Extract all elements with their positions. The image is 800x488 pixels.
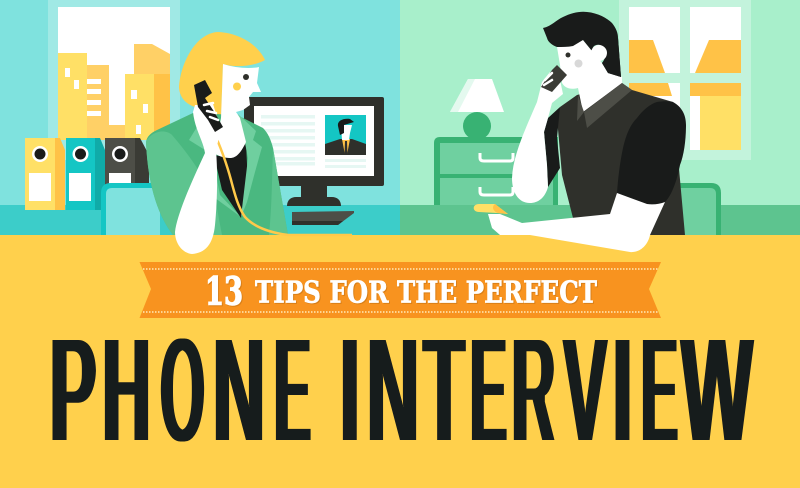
fingers: [544, 73, 552, 85]
keyboard: [292, 211, 354, 225]
window with curtains: [619, 0, 751, 160]
window with city skyline: [48, 0, 180, 160]
collar: [577, 83, 632, 128]
left lapel: [189, 122, 205, 150]
fingers: [204, 103, 218, 120]
woman jacket: [146, 113, 288, 235]
hair over ear edge: [602, 38, 621, 77]
lamp: [450, 79, 504, 140]
eye: [566, 52, 570, 58]
title: PHONE INTERVIEW: P: [50, 305, 96, 476]
right lapel: [238, 114, 262, 217]
black top: [214, 143, 248, 218]
armchair: [670, 183, 721, 235]
cheek: [233, 82, 241, 90]
ribbon banner: [140, 262, 661, 318]
lower left lapel: [215, 175, 241, 217]
phone cord: [214, 133, 352, 235]
eye: [243, 74, 249, 80]
yellow title panel: [0, 235, 800, 488]
hair: [543, 12, 621, 77]
title: PHONE INTERVIEW: I: [340, 305, 359, 477]
vest: [557, 83, 685, 235]
title: PHONE INTERVIEW: O: [160, 304, 205, 476]
title: PHONE INTERVIEW: E: [470, 304, 507, 476]
man on the phone: [474, 12, 686, 252]
ear: [591, 45, 607, 61]
panel: right room background: [400, 0, 800, 235]
cheek: [574, 60, 582, 68]
subtitle number: 13: [205, 268, 243, 314]
computer monitor with candidate profile: [244, 97, 384, 206]
title: PHONE INTERVIEW: R: [512, 303, 555, 476]
subtitle: TIPS FOR THE PERFECT: [255, 276, 598, 310]
title: PHONE INTERVIEW: N: [367, 305, 419, 476]
title: PHONE INTERVIEW: W: [681, 304, 753, 476]
business card: [474, 204, 508, 214]
jacket front left panel: [146, 131, 222, 235]
mobile phone: [541, 65, 567, 92]
right sleeve: [617, 101, 686, 204]
jacket right sleeve highlight: [269, 148, 288, 235]
binders: [25, 138, 149, 210]
title: PHONE INTERVIEW: H: [102, 305, 151, 477]
title: PHONE INTERVIEW: V: [563, 305, 607, 477]
dresser: [434, 137, 558, 205]
title: PHONE INTERVIEW: [50, 303, 753, 477]
title: PHONE INTERVIEW: T: [423, 304, 465, 477]
title: PHONE INTERVIEW: E: [274, 304, 311, 476]
title: PHONE INTERVIEW: I: [613, 305, 632, 477]
woman arm: [175, 104, 222, 254]
woman on the phone: [146, 32, 352, 254]
telephone handset: [194, 80, 223, 132]
panel: left office background: [0, 0, 400, 235]
title: PHONE INTERVIEW: N: [213, 305, 265, 476]
left sleeve: [544, 107, 560, 187]
face and neck: [557, 40, 622, 112]
office chair: [101, 183, 160, 235]
forearm and hand: [488, 193, 665, 252]
face and neck: [214, 64, 261, 158]
raised arm: [512, 72, 563, 203]
title: PHONE INTERVIEW: E: [641, 304, 678, 476]
hair: [179, 32, 265, 120]
